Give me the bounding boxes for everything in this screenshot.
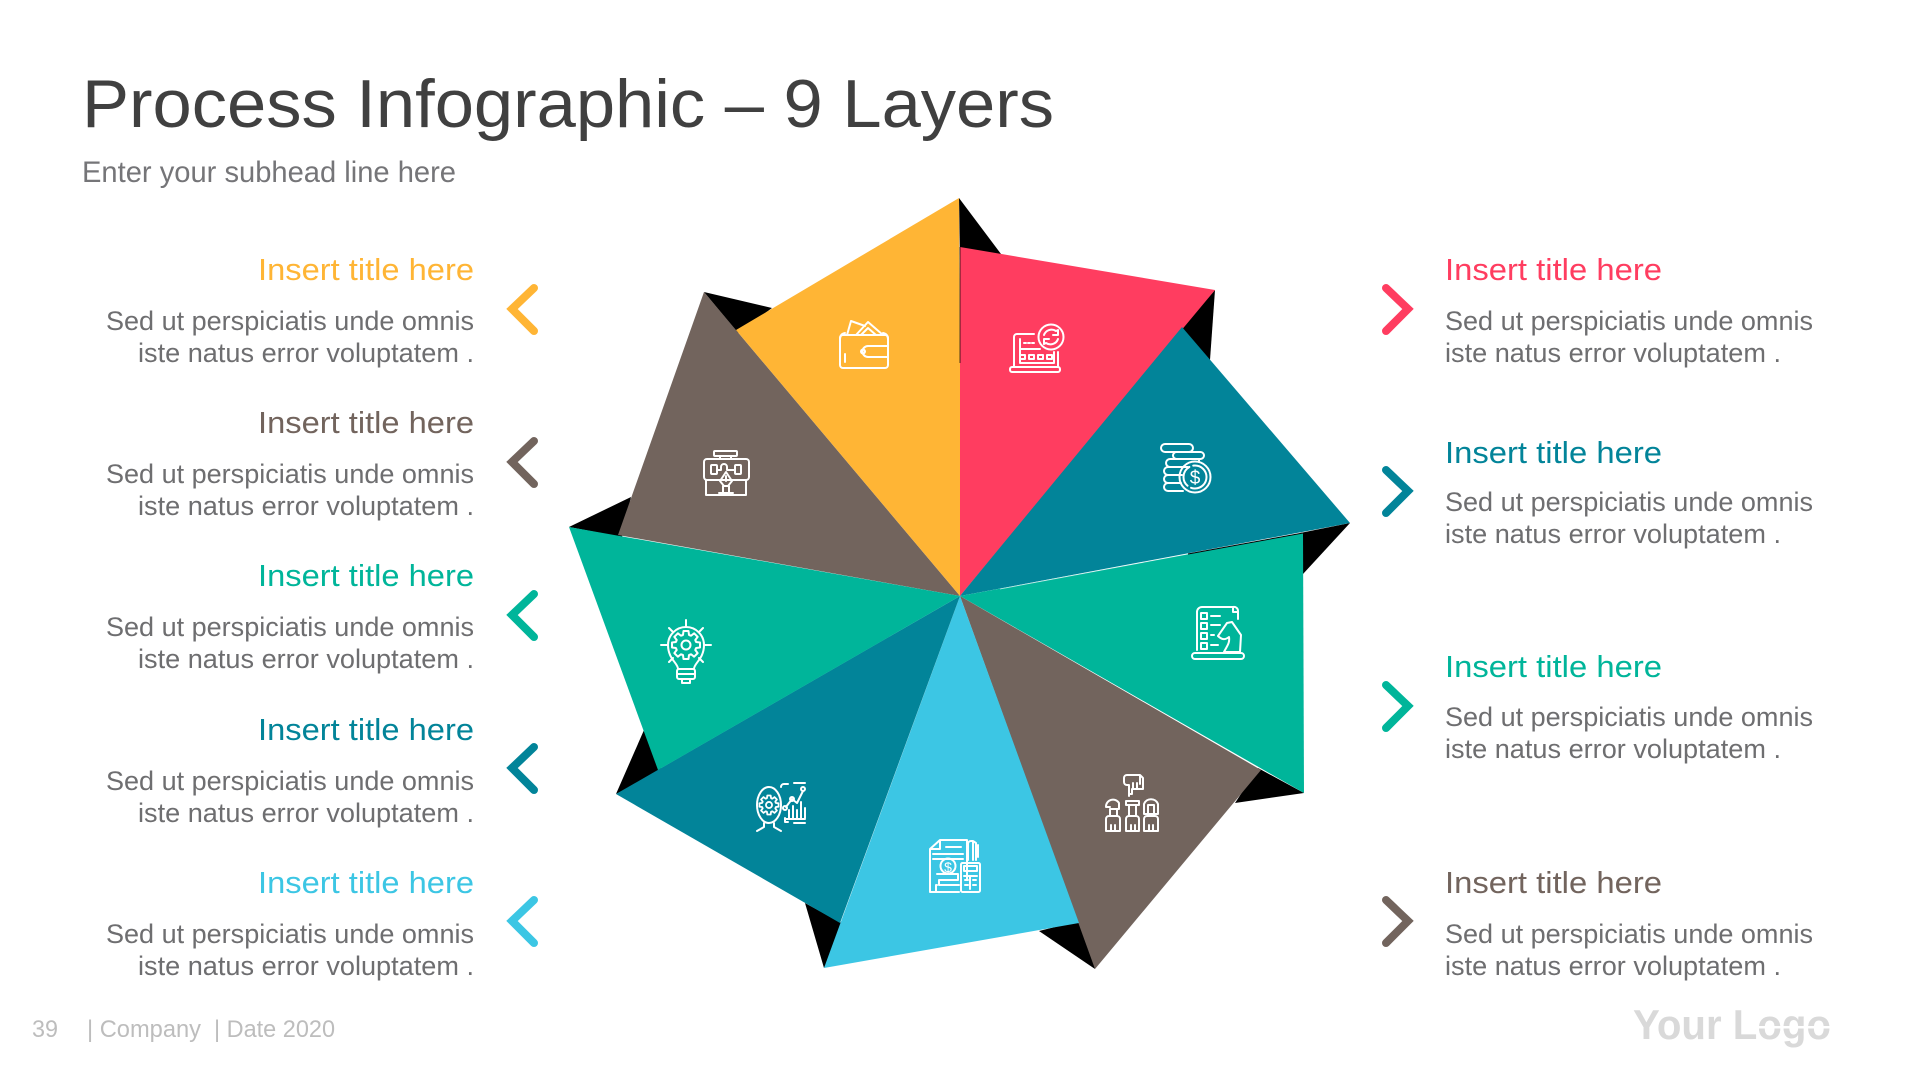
right item 1: red: iste natus error voluptatem .: [1445, 338, 1781, 368]
left item 3: green: iste natus error voluptatem .: [138, 644, 474, 674]
segment: red: [960, 247, 1215, 596]
right item 2: teal: [1386, 435, 1813, 549]
segment: teal lower left: [616, 596, 960, 923]
left item 3: green: Insert title here: [258, 558, 474, 593]
subhead: Enter your subhead line here: [82, 156, 456, 189]
segment: light blue: [824, 596, 1079, 968]
footer: | Company: [87, 1016, 201, 1043]
left item 1: yellow: Sed ut perspiciatis unde omnis: [106, 306, 474, 336]
left item 4: teal: Sed ut perspiciatis unde omnis: [106, 766, 474, 796]
left item 2: brown: Insert title here: [258, 405, 474, 440]
segment: green right: [960, 533, 1304, 793]
footer: [32, 1016, 335, 1043]
left item 3: green: [106, 558, 534, 674]
icon: head with gear and chart: [757, 783, 805, 831]
left item 5: light blue: Insert title here: [258, 865, 474, 900]
icon: coins with dollar: [1161, 444, 1210, 492]
right item 2: teal: Sed ut perspiciatis unde omnis: [1445, 487, 1813, 517]
footer: 39: [32, 1016, 58, 1043]
icon: lightbulb with gear: [661, 620, 711, 683]
right item 3: green: [1386, 649, 1813, 764]
left item 4: teal: [106, 712, 534, 828]
black shadow tips: [569, 198, 1350, 969]
right item 3: green: iste natus error voluptatem .: [1445, 734, 1781, 764]
title: Process Infographic – 9 Layers: [82, 66, 1054, 142]
logo: Your Logo: [1633, 1001, 1831, 1048]
left item 5: light blue: [106, 865, 534, 981]
right item 2: teal: Insert title here: [1445, 435, 1662, 470]
segment: teal upper right: [960, 327, 1350, 596]
left item 1: yellow: iste natus error voluptatem .: [138, 338, 474, 368]
left item 2: brown: iste natus error voluptatem .: [138, 491, 474, 521]
icon: dollar document with chess knight: [1192, 607, 1244, 659]
segment: brown lower right: [960, 596, 1261, 969]
left item 1: yellow: Insert title here: [258, 252, 474, 287]
right item 4: brown: iste natus error voluptatem .: [1445, 951, 1781, 981]
right item 3: green: Sed ut perspiciatis unde omnis: [1445, 702, 1813, 732]
left item 3: green: Sed ut perspiciatis unde omnis: [106, 612, 474, 642]
left item 5: light blue: iste natus error voluptatem .: [138, 951, 474, 981]
segment: green left: [569, 527, 960, 770]
icon: laptop with refresh arrows: [1010, 324, 1064, 372]
left item 2: brown: [106, 405, 534, 521]
left item 1: yellow: [106, 252, 534, 368]
left item 4: teal: iste natus error voluptatem .: [138, 798, 474, 828]
footer: | Date 2020: [214, 1016, 335, 1043]
icon: people under a paint roller: [1106, 775, 1158, 831]
right item 4: brown: [1386, 865, 1813, 981]
icon: coins with dollar: $: [1190, 468, 1201, 489]
right item 1: red: Insert title here: [1445, 252, 1662, 287]
left item 5: light blue: Sed ut perspiciatis unde omnis: [106, 919, 474, 949]
icon: wallet: [840, 321, 888, 368]
segment: brown upper left: [618, 292, 960, 596]
icon: toolbox with pen nib: [704, 451, 749, 495]
right item 1: red: [1386, 252, 1813, 368]
icon: invoice, coins and calculator: [930, 840, 980, 892]
left item 2: brown: Sed ut perspiciatis unde omnis: [106, 459, 474, 489]
icon: invoice, coins and calculator: $: [944, 859, 952, 875]
left item 4: teal: Insert title here: [258, 712, 474, 747]
right item 1: red: Sed ut perspiciatis unde omnis: [1445, 306, 1813, 336]
right item 4: brown: Sed ut perspiciatis unde omnis: [1445, 919, 1813, 949]
right item 2: teal: iste natus error voluptatem .: [1445, 519, 1781, 549]
process wheel: nine triangles: [569, 198, 1350, 969]
right item 4: brown: Insert title here: [1445, 865, 1662, 900]
right item 3: green: Insert title here: [1445, 649, 1662, 684]
segment: yellow: [736, 198, 960, 596]
